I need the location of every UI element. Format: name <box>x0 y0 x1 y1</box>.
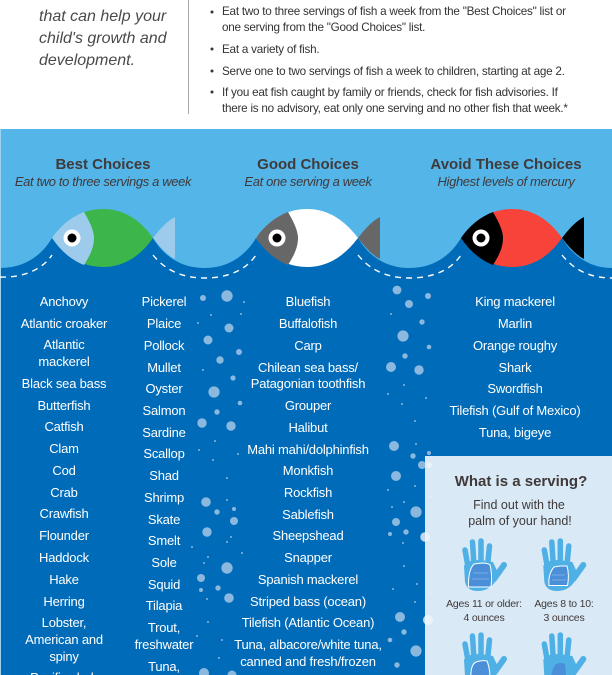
list: avoid these choices: Orange roughy <box>473 338 558 353</box>
advice bullet list: one serving from the "Good Choices" list. <box>222 21 425 34</box>
list: best choices column two: Skate <box>148 512 180 527</box>
list: best choices column two: Smelt <box>148 533 181 548</box>
list: good choices: Bluefish <box>286 294 330 309</box>
list: best choices column two: Plaice <box>147 316 181 331</box>
list: best choices column one: Catfish <box>44 419 84 434</box>
list: avoid these choices: Tuna, bigeye <box>479 425 551 440</box>
list: best choices column two: freshwater <box>135 637 194 652</box>
top intro panel <box>39 0 568 115</box>
panel: what is a serving <box>420 456 612 675</box>
list: best choices column one: Herring <box>43 594 85 609</box>
list: good choices: canned and fresh/frozen <box>240 654 376 669</box>
lead text: that can help your <box>39 8 167 25</box>
list: good choices: Rockfish <box>284 485 332 500</box>
list: best choices column one: American and <box>25 632 103 647</box>
list: best choices column one: Cod <box>52 463 76 478</box>
heading: best choices: Eat two to three servings a week <box>15 174 193 189</box>
list: best choices column one <box>21 294 108 675</box>
icon: red fish <box>461 209 584 267</box>
list: best choices column two: Shrimp <box>144 490 184 505</box>
advice bullet list: If you eat fish caught by family or friends, check for fish advisories. If <box>222 86 559 99</box>
list: best choices column one: Clam <box>49 441 79 456</box>
icon: hand third <box>464 635 504 675</box>
caption: ages 8 to 10: Ages 8 to 10: <box>534 598 594 610</box>
list: best choices column two: Scallop <box>143 446 185 461</box>
list: best choices column one: Haddock <box>39 550 90 565</box>
list: good choices: Tilefish (Atlantic Ocean) <box>242 615 374 630</box>
list: good choices: Halibut <box>288 420 328 435</box>
list: best choices column two: Salmon <box>143 403 185 418</box>
icon: green fish <box>52 209 175 267</box>
list: avoid these choices <box>449 294 581 440</box>
list: good choices: Buffalofish <box>279 316 337 331</box>
caption: ages 11 or older <box>446 598 522 624</box>
list: best choices column one: Anchovy <box>40 294 89 309</box>
list: good choices: Striped bass (ocean) <box>250 594 366 609</box>
list: good choices <box>234 294 382 669</box>
caption: ages 8 to 10: 3 ounces <box>543 612 585 624</box>
heading: good choices: Eat one serving a week <box>244 174 373 189</box>
list: good choices: Carp <box>294 338 322 353</box>
lead text: child's growth and <box>39 30 168 47</box>
list: best choices column two: Tilapia <box>146 598 183 613</box>
advice bullet list: there is no advisory, eat only one serving and no other fish that week.* <box>222 102 568 115</box>
list: best choices column two: Tuna, <box>148 659 180 674</box>
advice bullet list: Eat two to three servings of fish a week from the "Best Choices" list or <box>222 5 566 18</box>
water with waves <box>0 238 612 675</box>
list: good choices: Monkfish <box>283 463 333 478</box>
lead text: development. <box>39 52 135 69</box>
list: avoid these choices: King mackerel <box>475 294 555 309</box>
list: best choices column two: Pollock <box>144 338 185 353</box>
list: good choices: Tuna, albacore/white tuna, <box>234 637 382 652</box>
list: best choices column one: spiny <box>49 649 79 664</box>
advice bullet list: Eat a variety of fish. <box>222 43 319 56</box>
list: good choices: Snapper <box>284 550 333 565</box>
list: best choices column one: Flounder <box>39 528 90 543</box>
icon: white fish <box>256 209 380 267</box>
list: best choices column two: Oyster <box>145 381 183 396</box>
bubbles <box>191 286 433 675</box>
list: good choices: Spanish mackerel <box>258 572 358 587</box>
list: good choices: Mahi mahi/dolphinfish <box>247 442 369 457</box>
advice bullet list <box>210 5 568 115</box>
list: best choices column two: Shad <box>149 468 179 483</box>
list: best choices column two: Squid <box>148 577 180 592</box>
list: best choices column two <box>130 294 198 675</box>
list: best choices column one: mackerel <box>38 354 90 369</box>
advice bullet list: Serve one to two servings of fish a week to children, starting at age 2. <box>222 65 565 78</box>
icon: hand 4 ounces <box>464 541 504 591</box>
list: best choices column one: Butterfish <box>38 398 90 413</box>
list: good choices: Grouper <box>285 398 332 413</box>
heading: avoid these choices: Highest levels of mercury <box>438 174 576 189</box>
panel subheading: Find out with the <box>473 498 565 512</box>
list: best choices column two: Pickerel <box>142 294 187 309</box>
heading: best choices: Best Choices <box>55 156 151 173</box>
sky background <box>0 129 612 289</box>
icon: hand 3 ounces <box>543 541 583 591</box>
caption: ages 8 to 10 <box>534 598 594 624</box>
list: best choices column one: Crab <box>50 485 78 500</box>
list: best choices column one: Atlantic <box>43 337 85 352</box>
panel heading: What is a serving? <box>455 473 587 490</box>
heading: best choices <box>15 156 193 189</box>
icon: hand fourth <box>543 635 583 675</box>
list: best choices column two: Sole <box>151 555 177 570</box>
lead text <box>39 0 168 69</box>
list: good choices: Sheepshead <box>272 528 344 543</box>
list: avoid these choices: Shark <box>499 360 532 375</box>
list: avoid these choices: Marlin <box>498 316 532 331</box>
heading: good choices <box>244 156 373 189</box>
list: good choices: Sablefish <box>282 507 334 522</box>
heading: good choices: Good Choices <box>257 156 359 173</box>
caption: ages 11 or older: Ages 11 or older: <box>446 598 522 610</box>
panel subheading: palm of your hand! <box>468 514 572 528</box>
list: best choices column one: Hake <box>49 572 79 587</box>
panel bubbles <box>420 462 433 625</box>
list: best choices column two: Trout, <box>148 620 180 635</box>
heading: avoid these choices <box>430 156 582 189</box>
list: best choices column two: Sardine <box>142 425 186 440</box>
list: best choices column one: Black sea bass <box>22 376 107 391</box>
list: avoid these choices: Tilefish (Gulf of Mexico) <box>449 403 581 418</box>
list: best choices column one: Atlantic croaker <box>21 316 108 331</box>
caption: ages 11 or older: 4 ounces <box>463 612 505 624</box>
list: best choices column two: Mullet <box>147 360 181 375</box>
list: avoid these choices: Swordfish <box>487 381 543 396</box>
heading: avoid these choices: Avoid These Choices <box>430 156 582 173</box>
column headings <box>15 156 582 189</box>
list: good choices: Patagonian toothfish <box>251 376 365 391</box>
list: best choices column one: Crawfish <box>40 506 88 521</box>
list: good choices: Chilean sea bass/ <box>258 360 359 375</box>
panel subheading <box>468 498 572 528</box>
list: best choices column one: Lobster, <box>42 615 86 630</box>
